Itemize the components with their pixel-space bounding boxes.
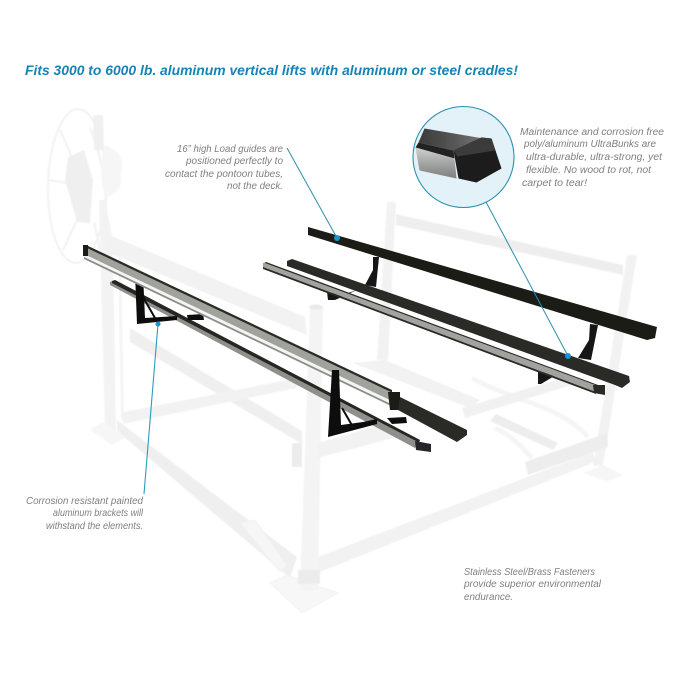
left bracket front [328,370,407,437]
right upper black bunk [308,227,657,340]
text: ultrabunks: carpet to tear! [522,178,587,189]
rails group [83,227,657,452]
left lower rail [110,280,431,452]
text: brackets [26,496,144,532]
text: load guides [165,144,283,192]
ramp cross beam [462,375,575,418]
text: fasteners [463,567,602,603]
text: brackets: aluminum brackets will [53,508,144,519]
text: ultrabunks: Maintenance and corrosion free [520,127,664,138]
right foot [583,465,623,482]
right block [525,433,608,475]
wheel post [93,115,104,150]
right silver rail [263,262,605,395]
middle side beam [130,328,302,444]
text: load guides: positioned perfectly to [185,156,283,167]
back centre post [377,202,396,360]
left upper silver rail [83,245,392,406]
text: fasteners: endurance. [464,592,513,603]
inset circle detail [413,106,514,208]
text: ultrabunks: ultra-durable, ultra-strong, yet [526,152,663,163]
back left thin post [118,250,124,420]
text: load guides: not the deck. [227,181,283,192]
front post collar [298,570,320,584]
front ledge [318,421,397,458]
ramp inner beam [490,414,558,450]
wheel [47,109,122,263]
front post [300,307,323,590]
text: brackets: withstand the elements. [46,521,143,532]
gusset [240,520,287,572]
back left post [99,200,116,432]
front foot [270,575,338,613]
right bottom beam [310,452,595,576]
ramp lower curve [495,428,532,458]
left black bunk end with collar [388,392,467,442]
leader line: load guides [287,148,340,241]
front bracket plate [292,443,302,467]
text: fasteners: provide superior environmental [463,579,602,590]
top side beam [107,234,307,335]
text: ultrabunks [520,127,664,189]
ramp beam back [353,360,480,408]
top back beam [396,214,623,275]
front post top [309,304,323,310]
left bracket rear [135,273,204,324]
ramp curved beam [472,378,588,437]
text: ultrabunks: flexible. No wood to rot, not [526,165,652,176]
right lower black bunk [287,259,630,388]
text: load guides: contact the pontoon tubes, [165,169,283,180]
text: brackets: Corrosion resistant painted [26,496,143,507]
right post [593,255,637,466]
title: Fits 3000 to 6000 lb. aluminum vertical lifts with aluminum or steel cradles! [25,63,519,78]
leader line: ultrabunks [486,202,571,359]
left foot [90,422,125,445]
leader line: brackets [144,322,160,494]
right bracket right [538,324,598,384]
lower cross bar [123,378,297,424]
infographic canvas [25,65,664,613]
right bracket left [327,257,379,300]
left bottom beam [117,420,297,578]
text: fasteners: Stainless Steel/Brass Fasteners [464,567,595,578]
text: load guides: 16” high Load guides are [177,144,283,155]
text: ultrabunks: poly/aluminum UltraBunks are [523,139,656,150]
ghosted lift frame [47,109,637,613]
